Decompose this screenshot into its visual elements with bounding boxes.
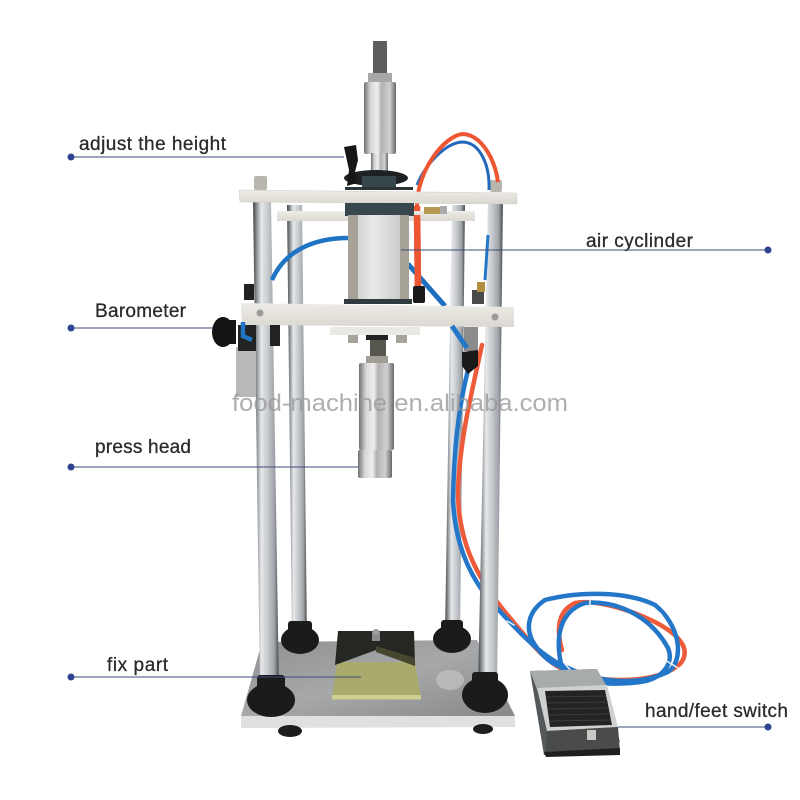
callout: Barometer: Barometer bbox=[95, 301, 187, 322]
air tubes: long run and coil bbox=[453, 345, 685, 684]
base plate bbox=[241, 640, 515, 737]
middle plate bbox=[241, 303, 514, 327]
second plate bbox=[277, 211, 475, 221]
front rods bbox=[253, 176, 503, 690]
callout: adjust the height bbox=[68, 134, 344, 160]
rear rods bbox=[287, 205, 465, 640]
upper tubes bbox=[272, 134, 498, 306]
rear feet bbox=[281, 620, 471, 654]
callout: press head: press head bbox=[95, 437, 191, 458]
press head bbox=[330, 327, 420, 478]
air cylinder bbox=[344, 203, 447, 304]
callout: fix part bbox=[68, 655, 361, 680]
callout: fix part: fix part bbox=[107, 655, 169, 676]
callout: air cyclinder bbox=[401, 231, 772, 254]
callout: hand/feet switch bbox=[618, 701, 788, 730]
foot pedal switch bbox=[530, 669, 620, 757]
callout: hand/feet switch: hand/feet switch bbox=[645, 701, 788, 722]
front feet bbox=[247, 672, 508, 717]
top plate bbox=[239, 190, 517, 204]
upper shaft with thread, collar and lever bbox=[344, 41, 413, 190]
valve on right rod bbox=[452, 282, 485, 374]
callout: adjust the height: adjust the height bbox=[79, 134, 227, 155]
watermark: food-machine.en.alibaba.com bbox=[232, 390, 568, 417]
callout: press head bbox=[68, 437, 358, 470]
machine: pneumatic press bbox=[212, 41, 685, 757]
barometer and filter bbox=[212, 284, 280, 397]
fix part block bbox=[332, 629, 421, 700]
callout: Barometer bbox=[68, 301, 213, 332]
callout: air cyclinder: air cyclinder bbox=[586, 231, 694, 252]
